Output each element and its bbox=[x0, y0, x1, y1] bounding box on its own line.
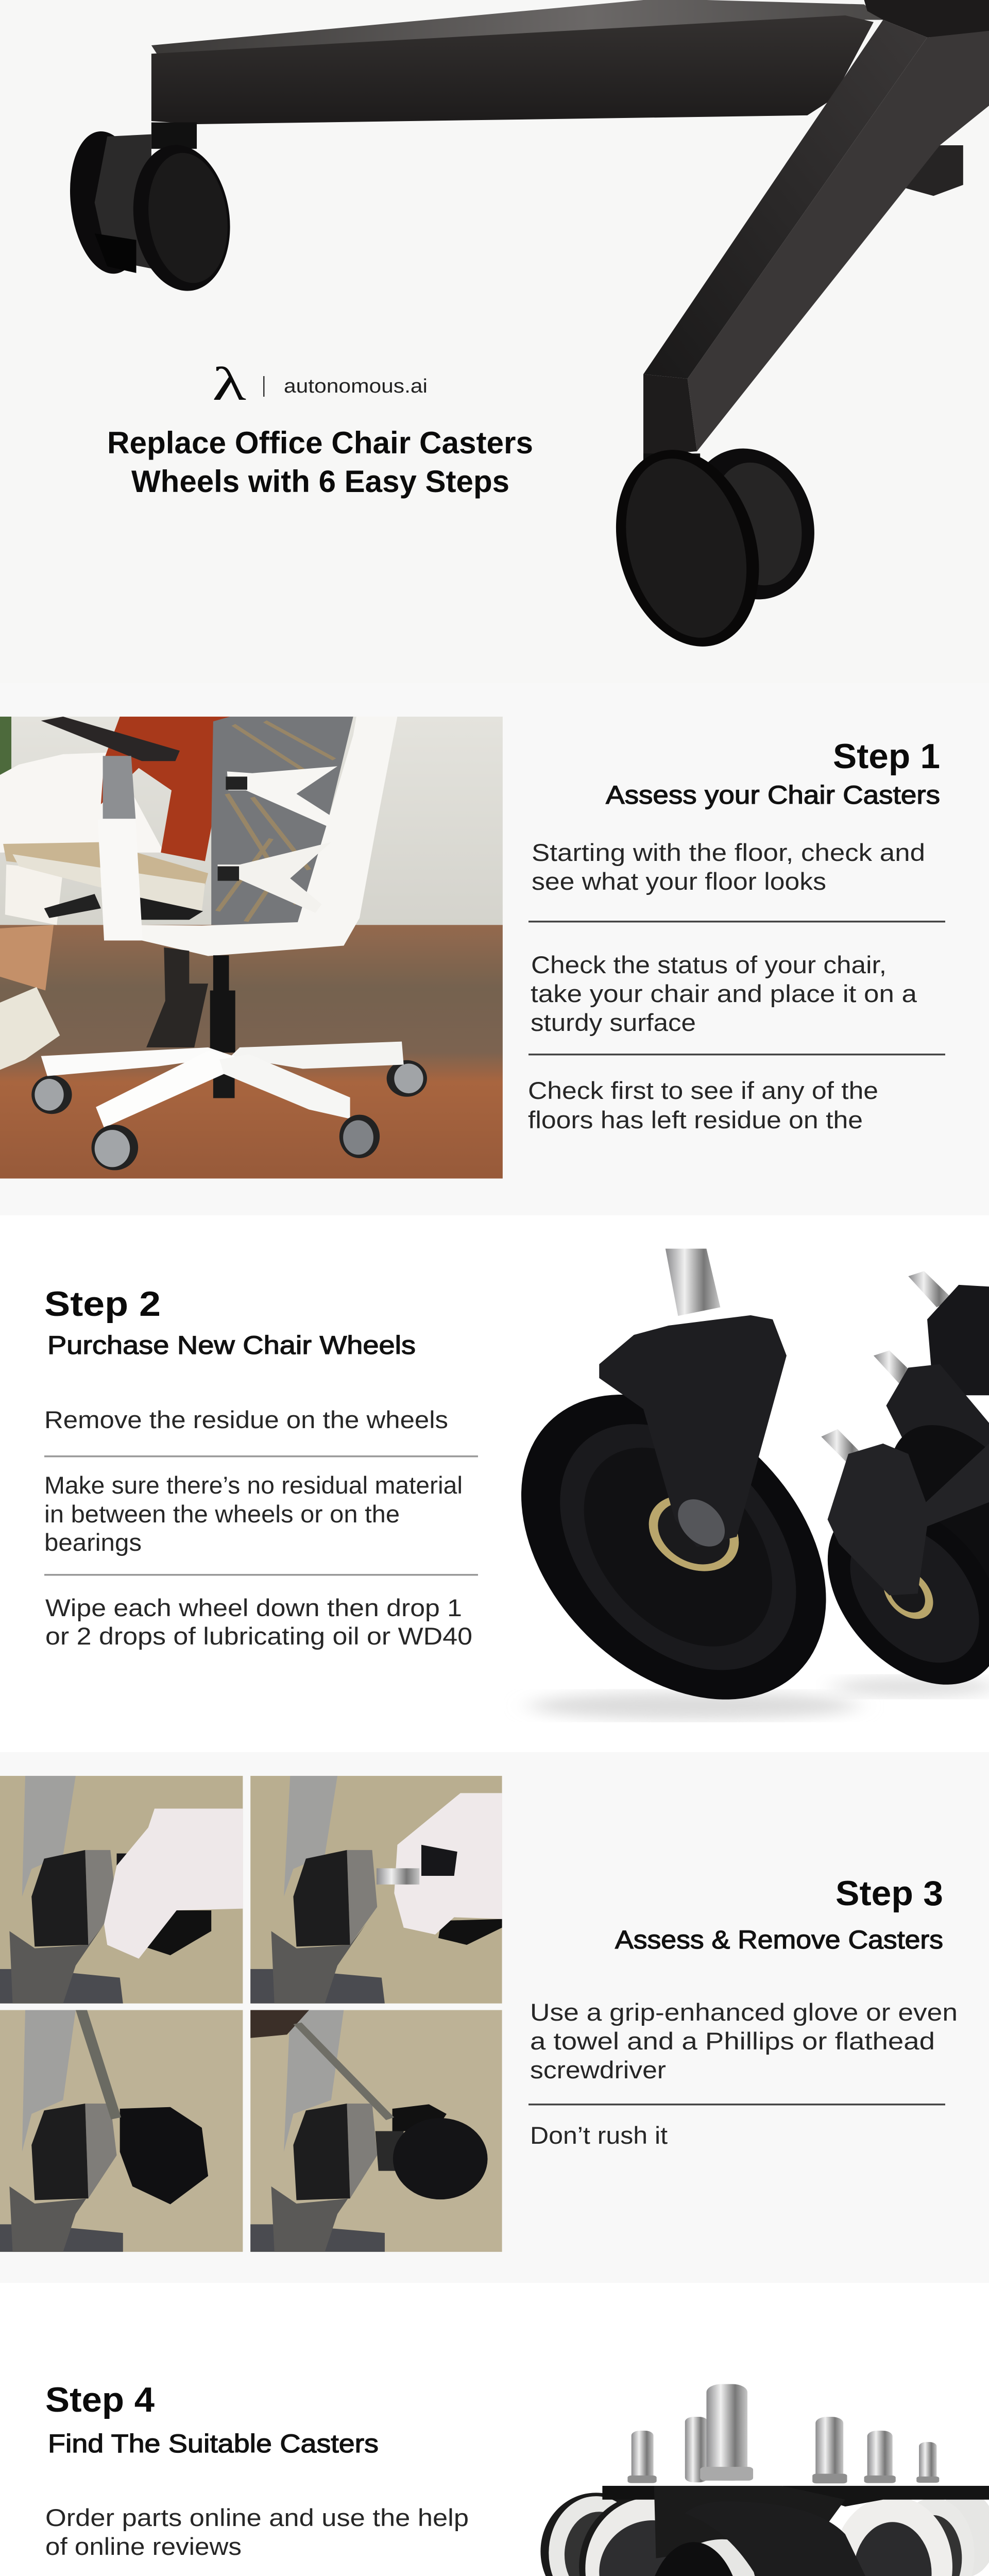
text: step 1 heading bbox=[606, 737, 940, 809]
text: step 3 heading: Step 3 bbox=[835, 1874, 943, 1913]
text: step 2 body: bearings bbox=[44, 1529, 142, 1556]
image: seated person on white chair on wood floor bbox=[0, 717, 503, 1178]
text: step 4 heading bbox=[45, 2380, 379, 2458]
title: Replace Office Chair Casters bbox=[107, 426, 533, 460]
main caster bbox=[666, 1249, 720, 1316]
text: step 2 body: Make sure there’s no residual material bbox=[44, 1471, 463, 1499]
panel: hero background bbox=[0, 0, 989, 683]
image: white and black dual-wheel casters bbox=[540, 2384, 989, 2576]
text: step 3 heading: Assess & Remove Casters bbox=[615, 1925, 943, 1954]
photo: gloved hand gripping caster bbox=[0, 1776, 243, 2004]
text: step 4 body bbox=[44, 2504, 478, 2576]
photo: screwdriver prying caster bbox=[0, 2010, 243, 2252]
title: Wheels with 6 Easy Steps bbox=[131, 464, 509, 499]
text: step 1 body: floors has left residue on the bbox=[528, 1106, 863, 1133]
photo: screwdriver and loose caster bbox=[250, 2010, 502, 2252]
text: step 4 body: Order parts online and use the help bbox=[45, 2504, 469, 2531]
text: step 1 body bbox=[528, 839, 945, 1133]
text: step 3 body: screwdriver bbox=[530, 2056, 666, 2083]
logo: autonomous.ai bbox=[212, 358, 428, 410]
text: step 3 body bbox=[528, 1998, 958, 2149]
text: step 1 body: Starting with the floor, check and bbox=[532, 839, 925, 866]
text: step 3 heading bbox=[615, 1874, 943, 1954]
text: step 1 body: see what your floor looks bbox=[532, 868, 826, 895]
logo: autonomous.ai: autonomous.ai bbox=[284, 376, 428, 397]
logo: autonomous.ai: λ bbox=[212, 358, 247, 410]
text: step 2 body: Remove the residue on the wheels bbox=[44, 1406, 448, 1433]
text: step 4 heading: Step 4 bbox=[45, 2380, 155, 2419]
image: black chair base with two casters bbox=[63, 0, 989, 653]
title bbox=[107, 426, 533, 499]
small front caster bbox=[821, 1429, 859, 1462]
text: step 2 body: Wipe each wheel down then drop 1 bbox=[45, 1594, 462, 1621]
text: step 4 body: of online reviews bbox=[45, 2533, 242, 2560]
text: step 3 body: Don’t rush it bbox=[530, 2122, 668, 2149]
text: step 1 heading: Assess your Chair Casters bbox=[606, 781, 940, 809]
text: step 4 heading: Find The Suitable Casters bbox=[48, 2429, 379, 2458]
panel: step 1 background bbox=[0, 683, 989, 1215]
text: step 1 body: Check first to see if any of the bbox=[528, 1077, 878, 1104]
text: step 3 body: a towel and a Phillips or flathead bbox=[530, 2027, 935, 2055]
image: four photos of removing a caster bbox=[0, 1776, 502, 2252]
text: step 1 body: Check the status of your chair, bbox=[531, 951, 886, 978]
photo: caster pulled out with glove bbox=[250, 1776, 502, 2004]
text: step 1 heading: Step 1 bbox=[833, 737, 940, 776]
text: step 2 heading: Step 2 bbox=[44, 1284, 161, 1324]
text: step 1 body: take your chair and place it on a bbox=[531, 980, 917, 1007]
panel: step 2 background bbox=[0, 1215, 989, 1752]
text: step 3 body: Use a grip-enhanced glove or even bbox=[530, 1998, 958, 2026]
image: black rollerblade casters bbox=[469, 1249, 989, 1720]
text: step 1 body: sturdy surface bbox=[531, 1009, 696, 1036]
text: step 2 body bbox=[44, 1406, 478, 1650]
panel: step 4 background bbox=[0, 2283, 989, 2576]
back casters bbox=[908, 1271, 952, 1307]
panel: step 3 background bbox=[0, 1752, 989, 2283]
left caster bbox=[70, 131, 125, 274]
text: step 2 heading bbox=[44, 1284, 416, 1360]
right caster bbox=[708, 448, 814, 600]
rear wheels bbox=[540, 2493, 622, 2576]
text: step 2 body: in between the wheels or on the bbox=[44, 1500, 400, 1528]
text: step 2 body: or 2 drops of lubricating oil or WD40 bbox=[45, 1622, 472, 1650]
text: step 2 heading: Purchase New Chair Wheels bbox=[47, 1331, 416, 1360]
pins bbox=[632, 2431, 654, 2476]
